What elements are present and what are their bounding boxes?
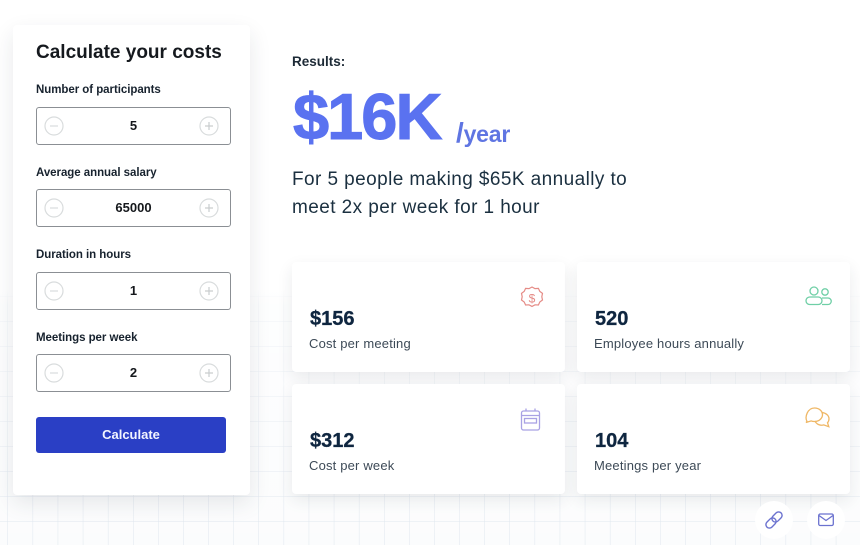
plus button <box>200 364 218 382</box>
results label: Results: <box>292 54 345 69</box>
value: 2 <box>130 365 137 380</box>
results description <box>292 169 627 218</box>
calculate button: Calculate <box>102 427 160 442</box>
card: cost per meeting <box>292 262 565 372</box>
calculate button <box>36 417 226 453</box>
link button <box>755 501 793 539</box>
card: cost per week <box>292 384 565 494</box>
icon: chat bubbles <box>805 407 830 428</box>
mail button <box>807 501 845 539</box>
minus button <box>44 282 64 300</box>
plus button <box>200 116 218 136</box>
icon: people <box>805 286 832 306</box>
value: 104 <box>595 430 628 452</box>
label: meetings: Meetings per week <box>36 332 137 344</box>
input: salary <box>36 189 231 227</box>
icon: envelope <box>818 513 834 526</box>
value: 65000 <box>115 200 152 215</box>
card: employee hours <box>577 262 850 372</box>
per-year unit: /year <box>456 117 510 148</box>
icon: dollar badge <box>520 286 544 307</box>
minus button <box>44 198 64 218</box>
headline figure: $16K <box>293 80 440 153</box>
icon: calendar <box>520 408 540 431</box>
plus button <box>200 282 218 300</box>
panel: calculator form <box>13 25 250 495</box>
value: $156 <box>310 308 354 330</box>
results description: For 5 people making $65K annually to <box>292 169 627 190</box>
plus button <box>200 198 218 218</box>
value: 5 <box>130 118 137 133</box>
label: duration: Duration in hours <box>36 249 131 261</box>
input: duration <box>36 272 231 310</box>
label: salary: Average annual salary <box>36 167 157 179</box>
minus button <box>44 116 64 136</box>
label: participants: Number of participants <box>36 84 161 96</box>
icon: dollar badge: $ <box>529 292 536 306</box>
value: 520 <box>595 308 628 330</box>
caption: Meetings per year <box>594 458 701 473</box>
form heading: Calculate your costs <box>36 42 222 63</box>
card: meetings per year <box>577 384 850 494</box>
minus button <box>44 364 64 382</box>
input: participants <box>36 107 231 145</box>
input: meetings <box>36 354 231 392</box>
value: $312 <box>310 430 354 452</box>
value: 1 <box>130 283 137 298</box>
caption: Employee hours annually <box>594 336 744 351</box>
icon: link <box>765 511 783 529</box>
caption: Cost per week <box>309 458 394 473</box>
caption: Cost per meeting <box>309 336 411 351</box>
results description: meet 2x per week for 1 hour <box>292 197 540 218</box>
